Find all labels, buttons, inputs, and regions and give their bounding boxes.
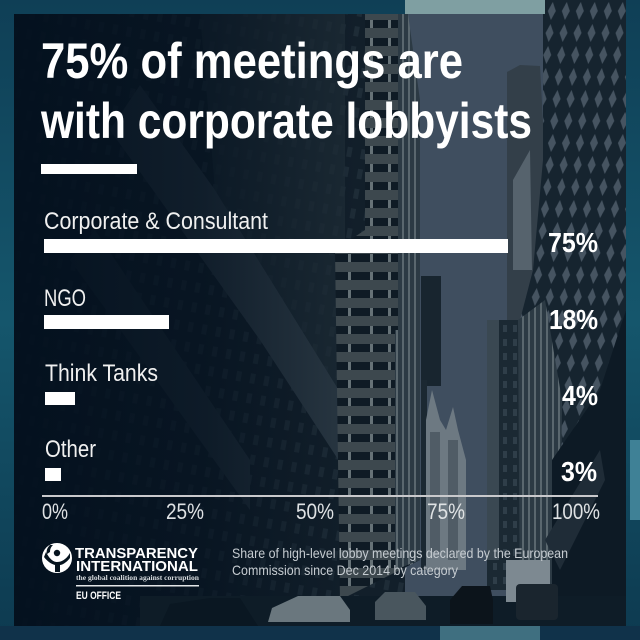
icon: TI globe (42, 543, 72, 573)
x axis: 0% (42, 499, 68, 524)
distant towers (426, 390, 466, 570)
title: 75% of meetings are (41, 33, 463, 89)
centre-left tower (335, 14, 420, 600)
source note (232, 545, 568, 578)
source note: Commission since Dec 2014 by category (232, 562, 458, 578)
x axis: 25% (166, 499, 204, 524)
row: Corporate & Consultant (44, 208, 598, 258)
x axis: 100% (552, 499, 600, 524)
right patterned building (520, 14, 626, 500)
x axis: 50% (296, 499, 334, 524)
logo: Transparency International EU Office (42, 543, 200, 602)
truck (506, 560, 550, 602)
x axis (42, 495, 600, 524)
title (40, 33, 532, 149)
row: Think Tanks: Think Tanks (45, 360, 158, 387)
lower right facades (518, 300, 562, 626)
row: Think Tanks (45, 360, 598, 411)
row: Other: Other (45, 436, 96, 463)
street ground (140, 596, 626, 626)
logo: Transparency International EU Office: INTERNATIONAL (76, 558, 198, 575)
logo: Transparency International EU Office: TRANSPARENCY (75, 545, 198, 562)
small dark tower (421, 276, 441, 386)
row: Other (45, 436, 597, 487)
row: Other: 3% (561, 456, 597, 487)
sky (405, 14, 545, 604)
title: with corporate lobbyists (40, 93, 532, 149)
row: NGO: 18% (549, 304, 598, 335)
source note: Share of high-level lobby meetings declared by the European (232, 545, 568, 561)
row: Corporate & Consultant: Corporate & Consultant (44, 208, 268, 235)
logo: Transparency International EU Office: EU OFFICE (76, 590, 121, 602)
row: NGO: NGO (44, 285, 86, 312)
bar chart (42, 208, 600, 524)
title underline (41, 164, 137, 174)
left buildings (14, 14, 405, 626)
lower right tower (487, 320, 521, 590)
row: NGO (44, 285, 598, 335)
x axis: 75% (427, 499, 465, 524)
row: Think Tanks: 4% (562, 380, 598, 411)
upper right tower (507, 65, 545, 320)
logo: Transparency International EU Office: the global coalition against corruption (76, 573, 200, 582)
cars (450, 586, 493, 624)
row: Corporate & Consultant: 75% (548, 227, 598, 258)
